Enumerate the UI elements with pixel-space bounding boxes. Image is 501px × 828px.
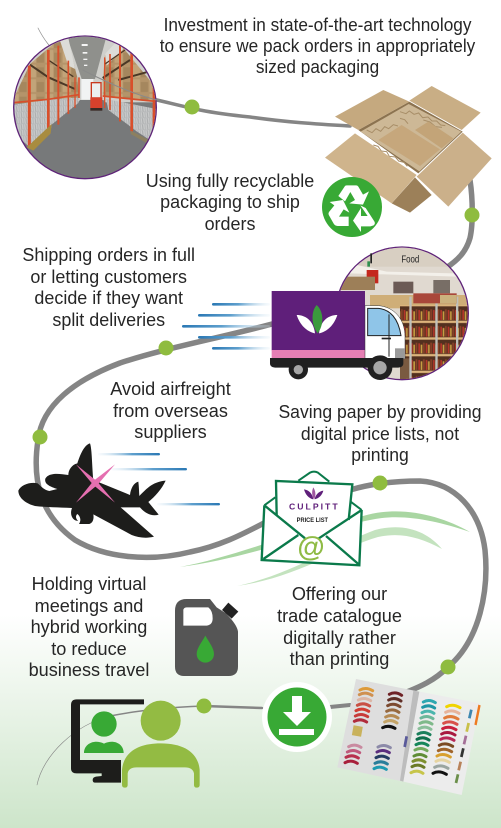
text: avoid airfreight: from overseas bbox=[113, 400, 228, 421]
swoosh decoration bbox=[180, 511, 470, 586]
icon: leaf logo bbox=[297, 305, 337, 333]
text: recyclable packaging: orders bbox=[205, 214, 255, 234]
text: virtual meetings bbox=[29, 573, 149, 680]
icon: video call bbox=[71, 699, 200, 788]
panel: supermarket photo bbox=[335, 246, 470, 383]
text: saving paper: digital price lists, not bbox=[301, 424, 459, 444]
text: shipping in full: split deliveries bbox=[52, 310, 165, 330]
text: virtual meetings: business travel bbox=[29, 659, 149, 680]
text: virtual meetings: to reduce bbox=[51, 638, 127, 659]
text: avoid airfreight: suppliers bbox=[134, 421, 207, 442]
logo mark bbox=[304, 487, 323, 499]
text: virtual meetings: Holding virtual bbox=[32, 573, 146, 594]
background gradient bbox=[0, 615, 501, 828]
icon: fuel can bbox=[175, 599, 238, 676]
text: shipping in full bbox=[22, 245, 195, 330]
heading text: technology investment: sized packaging bbox=[256, 56, 379, 77]
heading text: technology investment bbox=[160, 14, 475, 77]
text: virtual meetings: meetings and bbox=[35, 595, 143, 616]
text: virtual meetings: hybrid working bbox=[31, 616, 147, 637]
text: saving paper: printing bbox=[351, 445, 409, 465]
icon: price list envelope: PRICE LIST bbox=[297, 518, 328, 524]
panel: open cardboard box bbox=[325, 86, 492, 213]
panel: trade catalogue bbox=[337, 679, 481, 795]
text: avoid airfreight bbox=[110, 378, 231, 442]
text: saving paper: Saving paper by providing bbox=[278, 402, 482, 422]
text: trade catalogue: than printing bbox=[290, 648, 389, 669]
text: recyclable packaging bbox=[146, 171, 314, 234]
icon: price list envelope bbox=[262, 472, 362, 565]
text: recyclable packaging: Using fully recyclable bbox=[146, 171, 314, 191]
panel: supermarket photo: Food bbox=[401, 255, 419, 266]
speed lines: truck bbox=[182, 303, 270, 350]
icon: crossed out aeroplane bbox=[18, 443, 166, 538]
heading text: technology investment: Investment in state-of-the-art technology bbox=[164, 14, 471, 35]
icon: price list envelope: @ bbox=[297, 531, 325, 562]
text: trade catalogue: digitally rather bbox=[283, 627, 396, 648]
panel: warehouse photo bbox=[12, 35, 160, 182]
icon: download bbox=[262, 682, 332, 752]
text: trade catalogue: Offering our bbox=[292, 583, 387, 604]
text: avoid airfreight: Avoid airfreight bbox=[110, 378, 231, 399]
text: shipping in full: decide if they want bbox=[34, 288, 183, 308]
text: saving paper bbox=[278, 402, 482, 465]
icon: delivery truck bbox=[270, 291, 405, 380]
packing paper bbox=[361, 104, 461, 171]
heading text: technology investment: to ensure we pack orders in appropriately bbox=[160, 35, 475, 56]
speed lines: plane bbox=[98, 453, 220, 505]
journey dots bbox=[32, 100, 480, 714]
text: trade catalogue bbox=[277, 583, 402, 669]
icon: price list envelope: CULPITT bbox=[289, 501, 338, 511]
text: shipping in full: or letting customers bbox=[30, 267, 187, 287]
text: shipping in full: Shipping orders in full bbox=[22, 245, 195, 265]
text: trade catalogue: trade catalogue bbox=[277, 605, 402, 626]
icon: recycling symbol bbox=[322, 177, 382, 237]
text: recyclable packaging: packaging to ship bbox=[160, 192, 300, 212]
